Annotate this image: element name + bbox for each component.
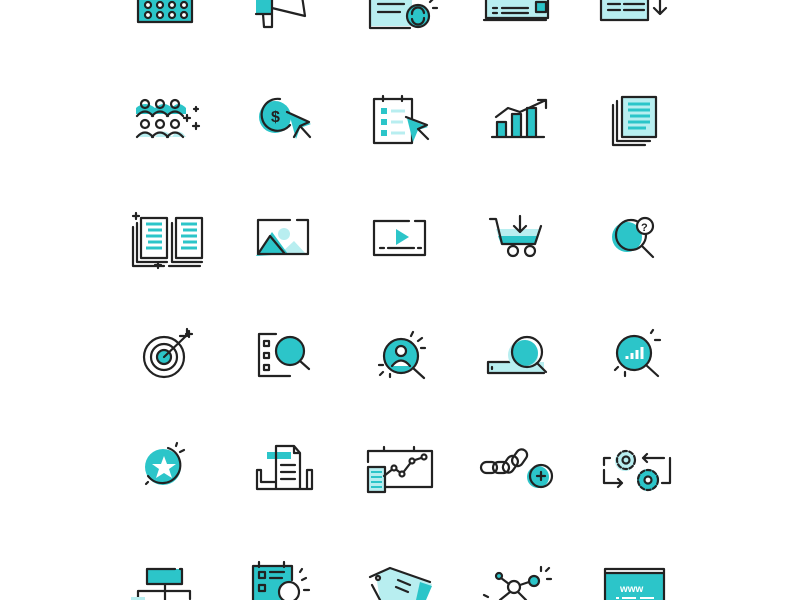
icon: two documents <box>133 213 202 268</box>
icon: sitemap <box>131 569 190 600</box>
icon: calendar grid <box>138 0 192 22</box>
icon: printer document <box>257 446 312 489</box>
icon: growth chart <box>492 100 546 137</box>
icon: people group <box>136 100 199 137</box>
icon: document refresh <box>370 0 437 28</box>
icon: dollar click: $ <box>271 109 280 126</box>
icon: image <box>256 220 308 256</box>
icon: video <box>374 221 425 255</box>
icon: price tag <box>370 568 432 600</box>
icon: network <box>484 567 551 600</box>
icon: analytics search <box>615 330 660 376</box>
icon: link add <box>481 447 552 488</box>
icon: dollar click <box>259 99 311 139</box>
icon: cart <box>490 216 541 256</box>
icon: search question: ? <box>641 222 648 234</box>
icon: website: www <box>619 584 644 595</box>
icon: gear exchange <box>604 451 670 491</box>
icon: checklist click <box>374 96 428 143</box>
icon: chart board <box>368 447 432 492</box>
icon: user search <box>379 332 425 378</box>
icon: website <box>605 569 664 600</box>
icon: search question <box>612 218 653 257</box>
icon: card <box>484 0 548 20</box>
icon: board search <box>252 562 309 600</box>
icon: documents stack <box>613 97 656 145</box>
icon: target <box>144 329 192 377</box>
icon: search bar <box>488 337 546 373</box>
icon: star badge <box>145 443 184 485</box>
icon: megaphone <box>256 0 305 27</box>
icon: document download <box>601 0 666 20</box>
icon: list search <box>259 334 309 376</box>
